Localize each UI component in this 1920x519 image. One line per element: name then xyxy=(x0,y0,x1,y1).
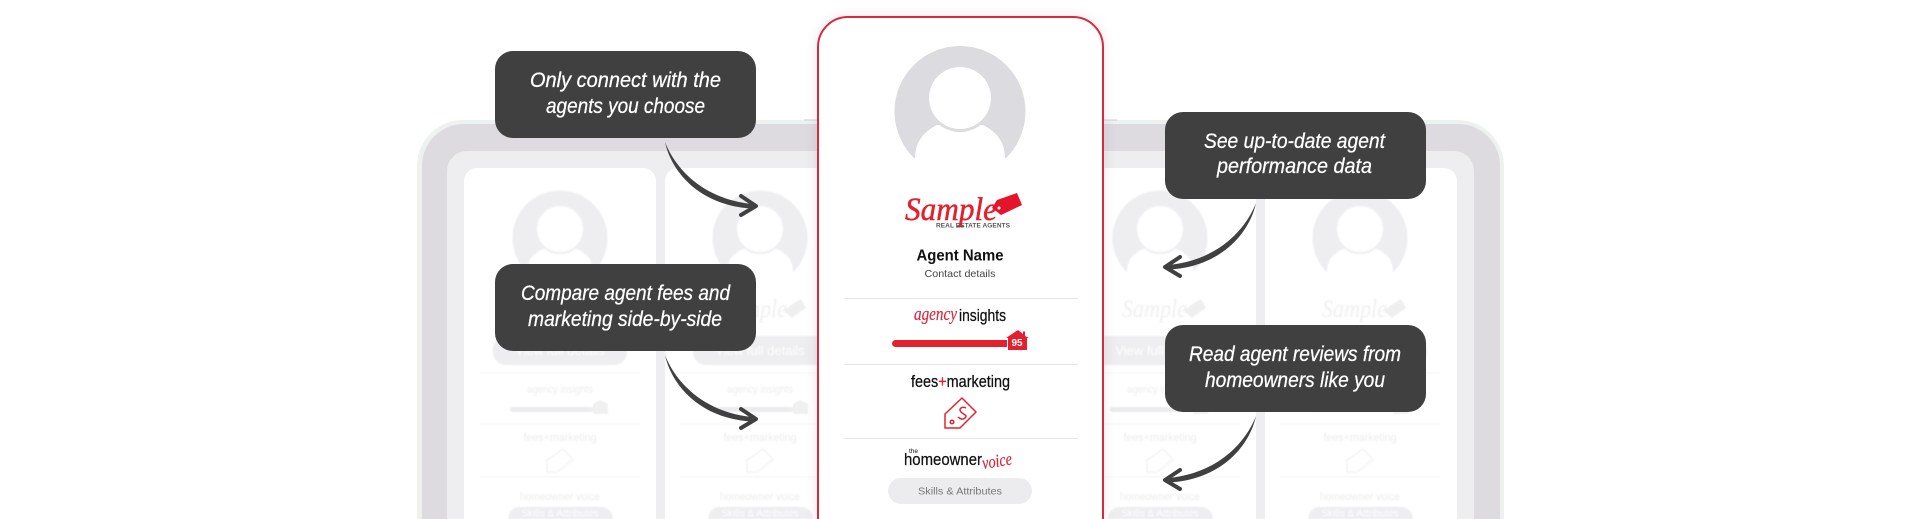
panel: featured agent card xyxy=(818,17,1103,519)
icon: price tag xyxy=(945,398,976,428)
callout: only connect xyxy=(495,51,756,138)
ghost agent column 3: fees+marketing xyxy=(1124,432,1196,444)
ghost agent column 4: homeowner voice xyxy=(1320,491,1400,503)
arrow: agent reviews xyxy=(1165,416,1256,489)
callout: compare fees: Compare agent fees and xyxy=(521,282,731,305)
arrow: only connect to agent xyxy=(665,142,756,215)
callout: agent reviews xyxy=(1165,325,1426,412)
ghost agent column 1: homeowner voice xyxy=(520,491,600,503)
logo: Sample Real Estate Agents: Sample xyxy=(905,192,997,228)
callout: agent reviews: Read agent reviews from xyxy=(1189,343,1401,366)
ghost agent column 2 xyxy=(680,191,840,519)
ghost agent column 1: agency insights xyxy=(527,384,593,396)
ghost agent column 4: agency insights xyxy=(1327,384,1393,396)
fees and marketing xyxy=(911,373,1010,428)
fees and marketing: fees+marketing xyxy=(911,373,1010,391)
ghost agent column 2: Sample xyxy=(722,296,787,323)
arrow: compare fees xyxy=(665,355,756,428)
ghost agent column 4: fees+marketing xyxy=(1324,432,1396,444)
callout: only connect: Only connect with the xyxy=(530,69,721,92)
ghost agent column 3 xyxy=(1080,191,1240,519)
ghost agent column 2: fees+marketing xyxy=(724,432,796,444)
ghost agent column 2: agency insights xyxy=(727,384,793,396)
ghost agent column 3: homeowner voice xyxy=(1120,491,1200,503)
ghost agent column 1: View full details xyxy=(515,343,605,358)
ghost agent column 2: homeowner voice xyxy=(720,491,800,503)
ghost agent column 4: Sample xyxy=(1322,296,1387,323)
ghost agent column 2: View full details xyxy=(715,343,805,358)
contact details: Contact details xyxy=(924,268,996,280)
ghost agent column 4 xyxy=(1280,191,1440,519)
icon: agent avatar xyxy=(894,46,1026,158)
ghost agent column 1: Sample xyxy=(522,296,587,323)
callout: agent reviews: homeowners like you xyxy=(1205,369,1385,392)
section dividers xyxy=(844,298,1078,438)
agency insights score: insights xyxy=(959,306,1006,325)
callout: compare fees xyxy=(495,264,756,351)
callout: performance data: performance data xyxy=(1216,155,1372,178)
callout: compare fees: marketing side-by-side xyxy=(528,308,722,331)
logo: Sample Real Estate Agents: REAL ESTATE AGENTS xyxy=(936,222,1011,230)
ghost agent column 1 xyxy=(480,191,640,519)
agency insights score: agency xyxy=(914,304,957,325)
agency insights score xyxy=(892,304,1029,350)
monitor frame xyxy=(417,120,1504,519)
homeowner voice heading: voice xyxy=(980,449,1013,473)
homeowner voice heading: homeowner xyxy=(904,450,982,469)
homeowner voice heading xyxy=(904,448,1013,473)
homeowner voice heading: the xyxy=(909,448,918,455)
button: skills and attributes: Skills & Attributes xyxy=(918,486,1002,498)
callout: only connect: agents you choose xyxy=(546,95,705,118)
agent name: Agent Name xyxy=(916,248,1004,264)
arrow: performance data xyxy=(1165,203,1256,276)
ghost agent column 4: View full details xyxy=(1315,343,1405,358)
button: skills and attributes xyxy=(888,478,1032,504)
agency insights score: 95 xyxy=(1011,338,1023,349)
ghost agent column 3: View full details xyxy=(1115,343,1205,358)
ghost agent column 3: Sample xyxy=(1122,296,1187,323)
ghost agent column 3: agency insights xyxy=(1127,384,1193,396)
callout: performance data xyxy=(1165,112,1426,199)
callout: performance data: See up-to-date agent xyxy=(1204,130,1386,153)
ghost agent column 1: fees+marketing xyxy=(524,432,596,444)
